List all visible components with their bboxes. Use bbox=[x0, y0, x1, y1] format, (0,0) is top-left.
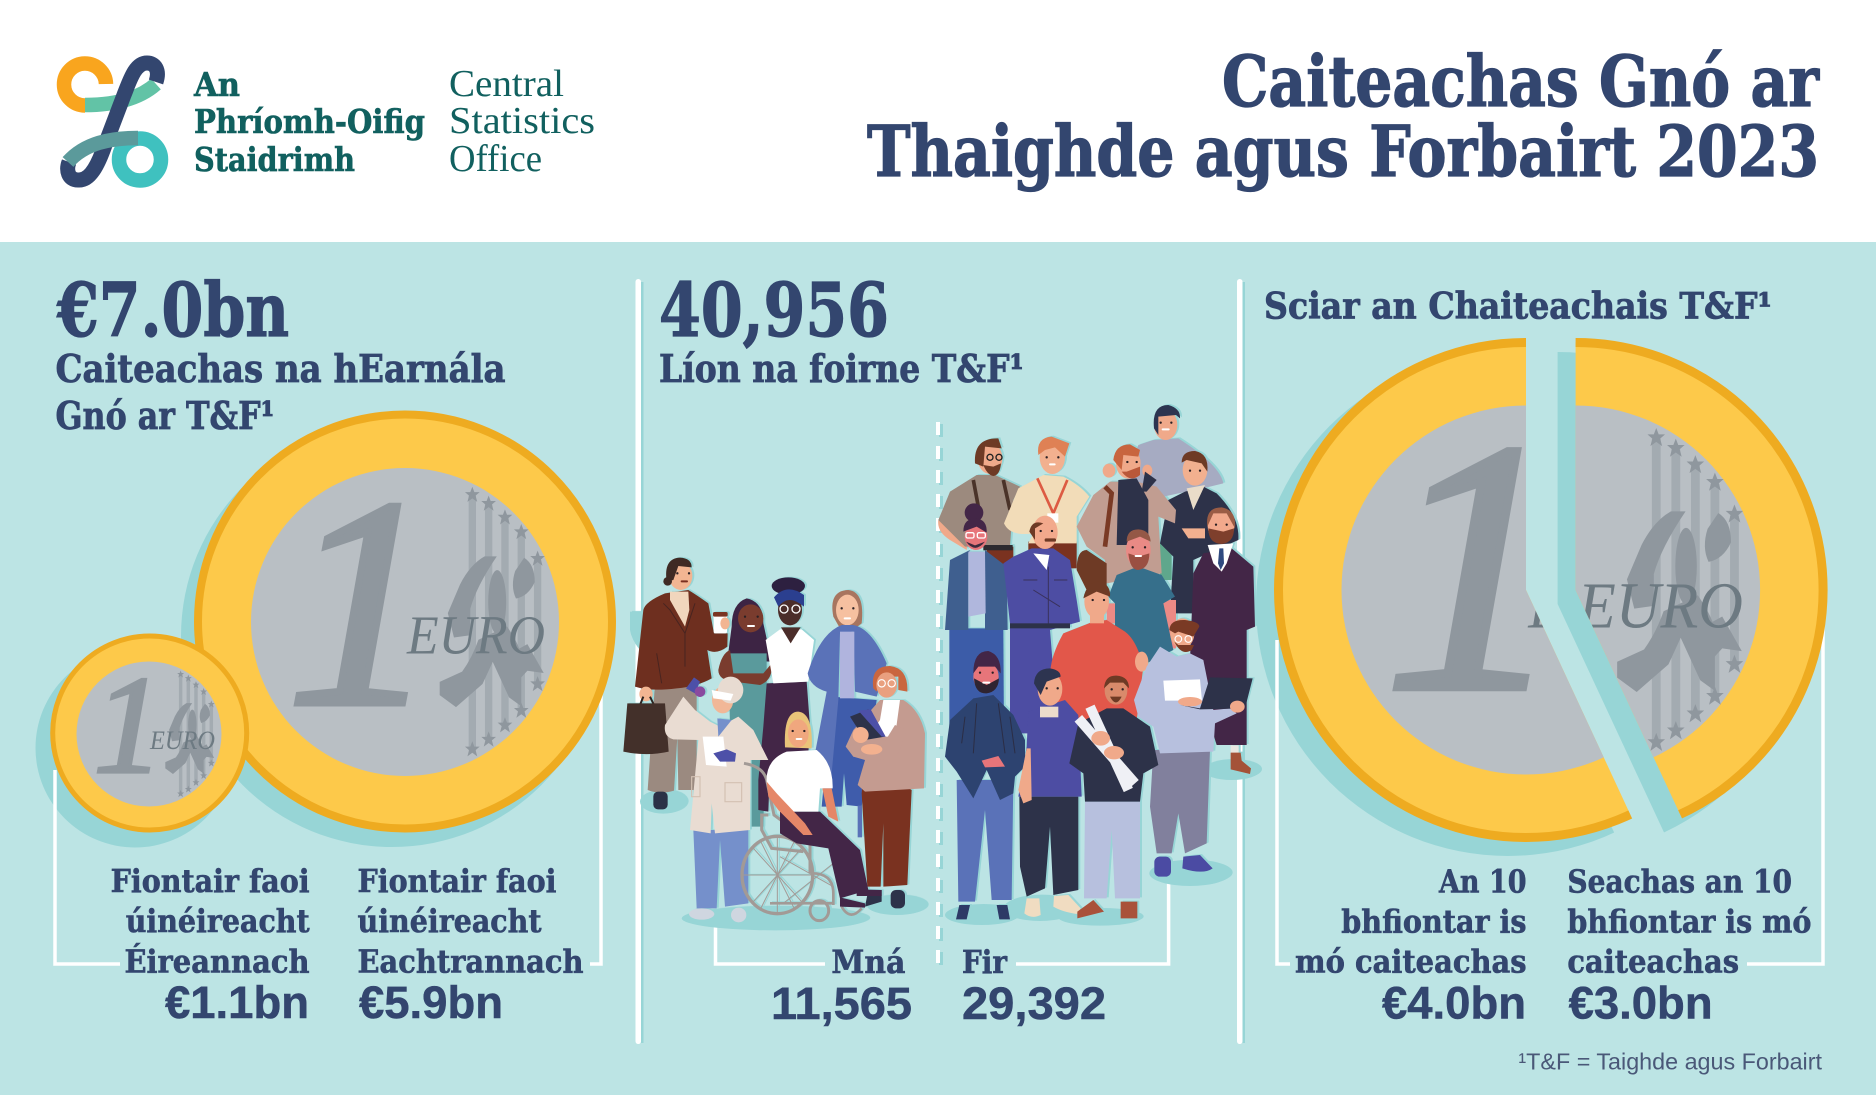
label: Irish-owned: úinéireacht bbox=[126, 903, 310, 940]
coin slice: all other enterprises bbox=[1576, 338, 1828, 818]
small coin: Irish-owned bbox=[53, 636, 247, 830]
logo Irish name: Phríomh-Oifig bbox=[194, 102, 425, 141]
man: cream shirt bbox=[1004, 437, 1089, 568]
leader lines bbox=[55, 770, 120, 964]
label: ten largest: bhfiontar is bbox=[1341, 904, 1526, 940]
logo bbox=[64, 63, 595, 180]
headline figure: €7.0bn bbox=[56, 268, 289, 354]
coin slice: ten largest spenders: 1 bbox=[1385, 370, 1563, 765]
large coin: foreign-owned bbox=[198, 414, 612, 828]
illustration: women bbox=[623, 558, 927, 930]
logo English name: Central bbox=[449, 63, 564, 105]
heading: Sciar an Chaiteachais T&F¹ bbox=[1264, 286, 1772, 328]
woman: scientist bbox=[665, 677, 768, 922]
panel: business expenditure bbox=[36, 268, 612, 1028]
label: all others bbox=[1567, 864, 1811, 1028]
coin slice: ten largest spenders: EURO bbox=[1527, 570, 1693, 642]
label: ten largest: An 10 bbox=[1438, 864, 1526, 900]
man: black sweater with rolled plans bbox=[1069, 676, 1158, 918]
large coin: foreign-owned: EURO bbox=[406, 604, 545, 666]
leader lines bbox=[716, 910, 825, 964]
label: all others: caiteachas bbox=[1567, 944, 1739, 980]
man: teal tee bbox=[1107, 529, 1176, 667]
logo Irish name: An bbox=[193, 65, 240, 104]
panel: share of expenditure bbox=[1256, 286, 1823, 1074]
small coin: Irish-owned: EURO bbox=[149, 726, 215, 755]
small coin: Irish-owned: 1 bbox=[94, 648, 164, 803]
man: taupe coat bbox=[1077, 444, 1176, 590]
label: ten largest: mó caiteachas bbox=[1295, 944, 1526, 980]
label: men bbox=[962, 944, 1106, 1029]
label: foreign-owned: €5.9bn bbox=[359, 977, 503, 1028]
man: purple tee bbox=[1018, 668, 1082, 917]
label: men: Fir bbox=[962, 944, 1007, 981]
logo English name: Office bbox=[449, 138, 542, 180]
label: ten largest: €4.0bn bbox=[1382, 978, 1526, 1028]
woman: brown jacket bbox=[623, 558, 730, 809]
illustration: men bbox=[938, 405, 1260, 926]
label: ten largest bbox=[1295, 864, 1526, 1028]
logo English name bbox=[449, 63, 595, 180]
label: all others: Seachas an 10 bbox=[1567, 864, 1792, 900]
logo mark bbox=[64, 63, 161, 180]
large coin: foreign-owned: 1 bbox=[287, 438, 436, 768]
men: front row bbox=[945, 618, 1260, 926]
column dividers bbox=[636, 279, 1245, 1044]
label: women bbox=[771, 944, 912, 1029]
label: Irish-owned: Éireannach bbox=[124, 942, 310, 980]
label: Irish-owned: Fiontair faoi bbox=[111, 863, 310, 900]
man: hoodie with laptop bbox=[1134, 618, 1253, 877]
leader lines bbox=[1277, 640, 1290, 964]
label: foreign-owned: úinéireacht bbox=[358, 903, 542, 940]
headline label: Líon na foirne T&F¹ bbox=[659, 346, 1024, 391]
split coin shadows bbox=[1256, 352, 1720, 856]
panel: R&D staff bbox=[623, 268, 1260, 1029]
coin shadows bbox=[36, 425, 603, 848]
man: grey shirt bbox=[1127, 405, 1223, 497]
headline label: Caiteachas na hEarnála bbox=[56, 346, 506, 391]
label: Irish-owned bbox=[111, 863, 310, 1028]
label: Irish-owned: €1.1bn bbox=[165, 977, 309, 1028]
man: burgundy coat bbox=[1190, 507, 1255, 745]
burgundy coat boot bbox=[1231, 745, 1251, 774]
man: red sweater bbox=[1050, 582, 1148, 720]
title bbox=[867, 40, 1820, 193]
woman: white blouse bbox=[758, 577, 814, 812]
logo Irish name bbox=[193, 65, 425, 179]
label: all others: €3.0bn bbox=[1569, 978, 1713, 1028]
label: all others: bhfiontar is mó bbox=[1567, 904, 1811, 940]
man: navy jacket with bun bbox=[945, 503, 1008, 740]
logo Irish name: Staidrimh bbox=[194, 140, 355, 179]
label: women: 11,565 bbox=[771, 978, 912, 1029]
men: back rows bbox=[938, 405, 1255, 745]
man: dark suit bbox=[1160, 451, 1238, 613]
woman: wheelchair user bbox=[742, 712, 882, 921]
label: foreign-owned bbox=[358, 863, 584, 1028]
headline label: Gnó ar T&F¹ bbox=[56, 393, 274, 438]
coin slice: all other enterprises: EURO bbox=[1577, 570, 1743, 642]
woman: teal dress bbox=[718, 598, 772, 827]
headline figure: 40,956 bbox=[659, 268, 889, 354]
dashed divider bbox=[938, 422, 941, 965]
label: men: 29,392 bbox=[962, 978, 1106, 1029]
footnote: ¹T&F = Taighde agus Forbairt bbox=[1518, 1048, 1823, 1074]
headline label bbox=[56, 346, 506, 438]
coin slice: ten largest spenders bbox=[1274, 338, 1632, 842]
man: purple overalls bbox=[1003, 516, 1080, 733]
woman: taupe jacket bbox=[846, 666, 925, 908]
background panel bbox=[0, 242, 1876, 1095]
man: dark striped shirt bbox=[945, 651, 1025, 919]
woman: blue coat bbox=[808, 590, 887, 837]
label: women: Mná bbox=[831, 944, 905, 981]
label: foreign-owned: Eachtrannach bbox=[358, 944, 584, 980]
man: suspenders bbox=[938, 438, 1020, 567]
label: foreign-owned: Fiontair faoi bbox=[358, 863, 557, 900]
logo English name: Statistics bbox=[449, 100, 595, 142]
